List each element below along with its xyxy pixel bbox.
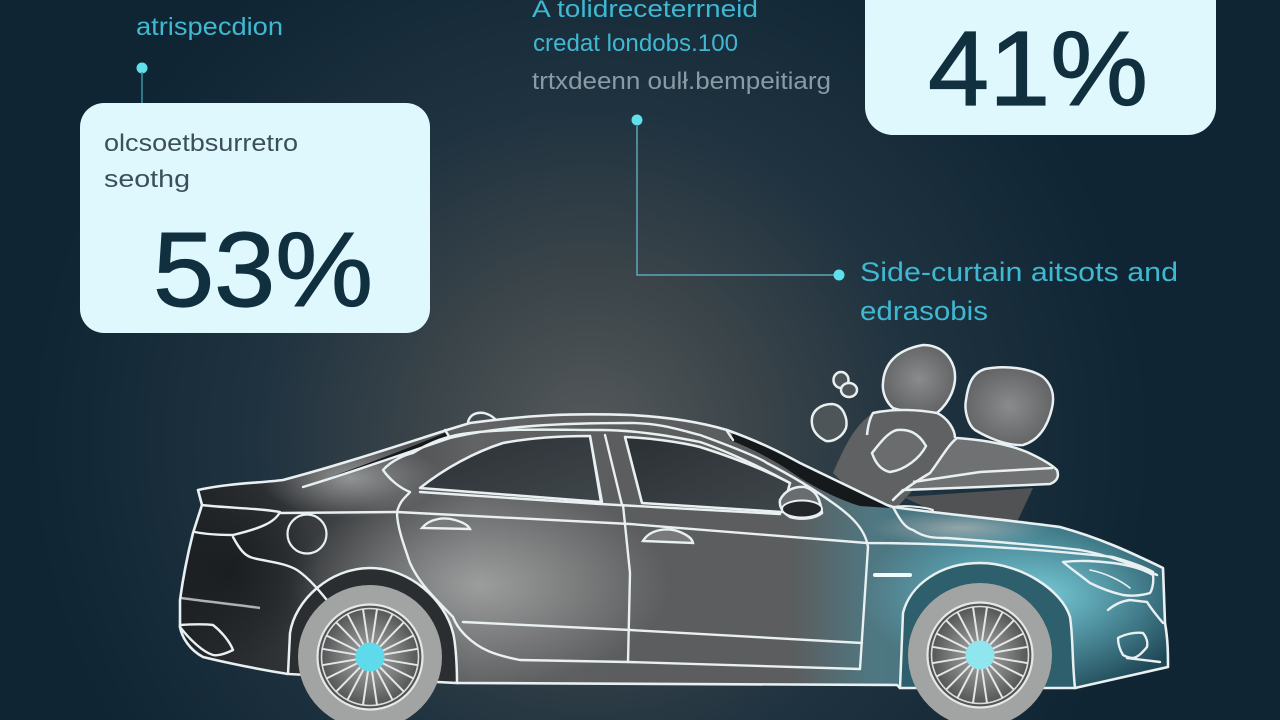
connector dot and line (136, 62, 148, 104)
callout: top-left label (136, 13, 283, 104)
callout: top-centre note: trtxdeenn oulł.bempeitiarg (532, 68, 831, 95)
front wheel arch (900, 563, 1075, 688)
door handles (422, 519, 693, 543)
rear window (420, 436, 601, 502)
callout: top-centre note (532, 0, 831, 95)
car body (180, 414, 1168, 688)
panel: 53% stat card: seothg (104, 166, 190, 193)
label: side-curtain airbags (860, 257, 1178, 326)
label: side-curtain airbags: Side-curtain aitsots and (860, 257, 1178, 287)
rear seat back (833, 410, 955, 512)
body lighting (208, 448, 1166, 676)
front seat cushion (893, 438, 1058, 522)
card figure: 41% (928, 10, 1148, 128)
card description: olcsoetbsurretro (104, 130, 298, 157)
black roof strips (303, 432, 890, 508)
rear wheel (298, 585, 442, 720)
panel: 53% stat card (80, 103, 430, 333)
side mirror (780, 487, 822, 519)
label: side-curtain airbags: edrasobis (860, 296, 988, 326)
label text: atrispecdion (136, 13, 283, 41)
small airbag bubbles (812, 372, 857, 441)
front wheel (908, 583, 1052, 720)
callout: top-centre note: credat londobs.100 (533, 30, 738, 57)
panel: 41% stat card (865, 0, 1216, 135)
side marker light (875, 573, 910, 577)
car outline (180, 414, 1168, 688)
icon: seats and airbags (812, 345, 1058, 522)
front window (625, 437, 790, 512)
card figure: 53% (153, 211, 373, 329)
illustration: car side view (140, 413, 1220, 720)
front seat headrest (965, 367, 1053, 445)
connector: elbow line to side-curtain label (632, 114, 844, 280)
body detail lines (180, 413, 1163, 669)
rear seat headrest (883, 345, 955, 413)
fuel door (288, 514, 326, 554)
rear bumper highlight (181, 598, 260, 608)
rear wheel arch (288, 568, 457, 683)
